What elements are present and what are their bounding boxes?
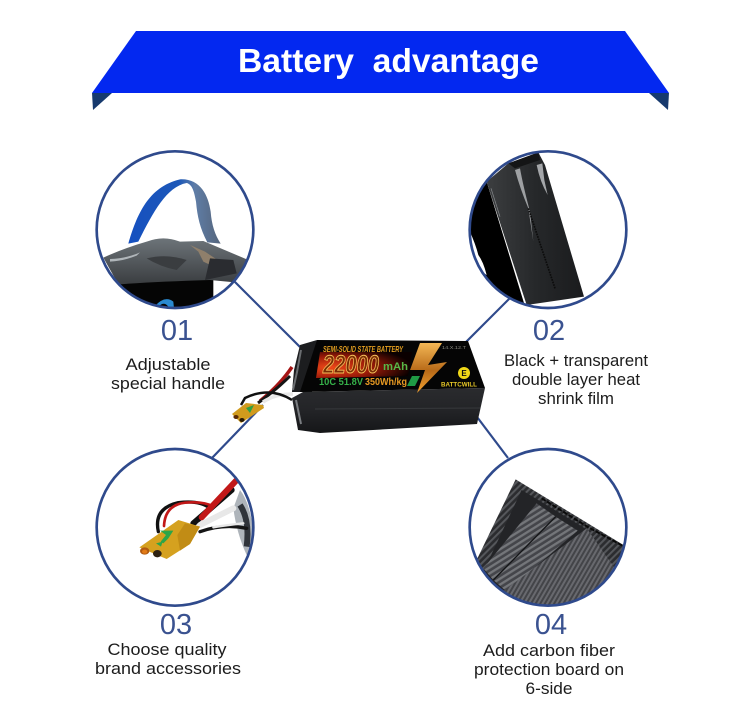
- lightning bolt: [410, 343, 447, 393]
- caption: [474, 642, 624, 698]
- caption: Adjustable: [126, 356, 210, 374]
- caption: [111, 356, 225, 393]
- central battery: [232, 340, 485, 433]
- capacity: 22000: [322, 351, 379, 379]
- circle outline: [470, 449, 626, 606]
- red glow: [316, 352, 412, 378]
- battery label: 350Wh/kg: [365, 376, 407, 388]
- banner ribbon: [92, 31, 669, 93]
- number: 02: [533, 315, 565, 347]
- panel: 02 heat shrink film: [465, 145, 648, 408]
- small marks: 14.X.12.T: [442, 345, 466, 350]
- banner right fold: [649, 93, 669, 110]
- circle outline: [470, 151, 626, 308]
- number: 04: [535, 609, 567, 641]
- battery wires: [241, 367, 293, 405]
- green tab: [407, 376, 420, 386]
- caption: Add carbon fiber: [483, 642, 616, 660]
- caption: [504, 352, 648, 408]
- title banner: [92, 31, 669, 110]
- unit: mAh: [383, 361, 408, 373]
- panel: 03 connector: [95, 449, 255, 678]
- panel: 01 handle: [97, 151, 253, 393]
- caption: Black + transparent: [504, 352, 648, 370]
- detail photo: film: [465, 145, 626, 312]
- title: Battery advantage: [238, 42, 539, 79]
- brand name: BATTCWILL: [441, 382, 477, 388]
- caption: [95, 641, 241, 678]
- caption: shrink film: [538, 390, 614, 408]
- caption: 6-side: [526, 680, 572, 698]
- battery left end: [292, 340, 317, 392]
- battery connector: [232, 403, 264, 423]
- banner left fold: [92, 93, 112, 110]
- detail photo: connector: [97, 449, 255, 606]
- circle outline: [97, 151, 253, 308]
- panel: 04 carbon fiber board: [465, 449, 632, 698]
- caption: protection board on: [474, 661, 624, 679]
- detail photo: carbon fiber: [465, 449, 632, 613]
- battery label: [300, 340, 485, 393]
- number: 01: [161, 315, 193, 347]
- detail photo: handle: [97, 151, 253, 312]
- battery front face: [292, 388, 485, 433]
- specs: 10C 51.8V: [319, 376, 363, 388]
- small heading: SEMI-SOLID STATE BATTERY: [323, 344, 404, 354]
- caption: special handle: [111, 375, 225, 393]
- caption: brand accessories: [95, 660, 241, 678]
- battery label: E: [461, 369, 467, 378]
- number: 03: [160, 609, 192, 641]
- brand logo: [458, 367, 470, 379]
- caption: double layer heat: [512, 371, 640, 389]
- connector lines: [212, 279, 510, 458]
- caption: Choose quality: [108, 641, 227, 659]
- circle outline: [97, 449, 253, 606]
